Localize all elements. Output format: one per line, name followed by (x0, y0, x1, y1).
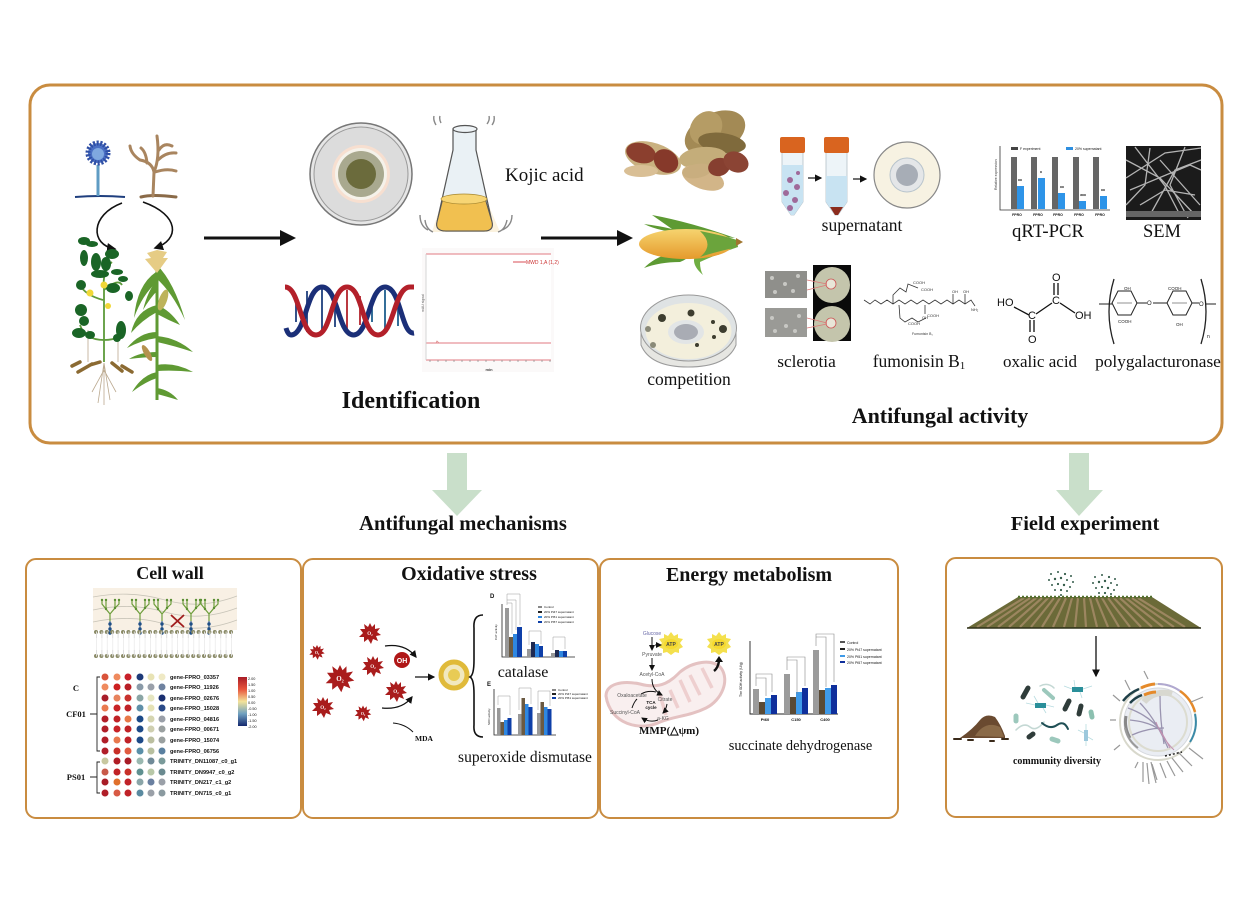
diagram: mitochondrion and TCA cycle: TCA (646, 700, 656, 705)
diagram: fumonisin B1 structure (864, 280, 979, 336)
chart: succinate dehydrogenase bars: The SDH activity (U/g) (739, 662, 743, 697)
diagram: fumonisin B1 structure: COOH (913, 280, 925, 285)
label: oxalic acid: oxalic acid (1003, 352, 1078, 371)
label: fumonisin B1: fumonisin B (873, 351, 960, 371)
chart: gene expression dot heatmap: gene-FPRO_00671 (170, 727, 219, 733)
arrow: fungus to maize (143, 202, 172, 248)
diagram: oxalic acid structure: C (1028, 310, 1036, 322)
heading: Oxidative stress: Oxidative stress (401, 563, 537, 585)
chart: superoxide dismutase bars: E (487, 682, 491, 688)
diagram: reactive oxygen species: OH (397, 658, 407, 665)
diagram: reactive oxygen species (309, 623, 434, 743)
diagram: mitochondrion and TCA cycle (606, 631, 731, 726)
heading: Identification: Identification (342, 388, 480, 414)
icon: DNA double helix (285, 287, 414, 335)
icon: competition petri dish (640, 295, 736, 367)
diagram: mitochondrion and TCA cycle: Acetyl-CoA (639, 672, 665, 678)
diagram: mitochondrion and TCA cycle: cycle (645, 705, 657, 710)
legend: colour scale: 1.50 (248, 683, 255, 687)
chart: gene expression dot heatmap: TRINITY_DN217_c1_g2 (170, 780, 231, 786)
icon: soil mound (954, 716, 1008, 741)
chart: succinate dehydrogenase bars: 20% Pt57 supernatant (847, 661, 882, 665)
panel: energy metabolism (600, 559, 898, 818)
icon: shaking flask (420, 116, 512, 232)
chart: qRT-PCR bars: FPRO (1012, 213, 1022, 217)
image: sclerotia (765, 265, 851, 342)
chart: gene expression dot heatmap: TRINITY_DN715_c0_g1 (170, 791, 231, 797)
chart: superoxide dismutase bars: 20% Pt47 supernatant (558, 692, 588, 696)
diagram: polygalacturonase structure: O (1199, 302, 1204, 308)
icon: fungal cell (441, 662, 467, 688)
diagram: fumonisin B1 structure: OH (952, 289, 958, 294)
label: qRT-PCR: qRT-PCR (1012, 221, 1084, 242)
chart: gene expression dot heatmap: PS01 (67, 772, 85, 782)
image: SEM micrograph (1126, 146, 1201, 220)
diagram: reactive oxygen species: O₂ (393, 690, 399, 695)
chart: gene expression dot heatmap: gene-FPRO_06756 (170, 749, 219, 755)
diagram: fumonisin B1 structure: COOH (921, 287, 933, 292)
label: catalase: catalase (498, 664, 548, 681)
label: superoxide dismutase: superoxide dismutase (458, 749, 592, 766)
chart: superoxide dismutase bars (487, 682, 588, 735)
diagram: polygalacturonase structure (1099, 279, 1216, 344)
chart: catalase bars: 20% Pt57 supernatant (544, 620, 574, 624)
arrow: to antifungal mechanisms (432, 453, 482, 516)
illustration: soil bacteria (1016, 680, 1093, 746)
label: fumonisin B1: 1 (960, 360, 965, 372)
arrow: identification to antifungal activity (541, 230, 633, 246)
diagram: mitochondrion and TCA cycle: a-KG (657, 716, 669, 722)
diagram: reactive oxygen species: O₂ (315, 650, 320, 655)
chart: succinate dehydrogenase bars: C400 (820, 717, 831, 722)
diagram: oxalic acid structure: O (1052, 272, 1061, 284)
icon: brown Fusarium fungus (130, 136, 176, 197)
label: MMP: MMP(△ψm) (639, 725, 699, 737)
chart: catalase bars: CAT activity (494, 624, 498, 640)
chart: gene expression dot heatmap: gene-FPRO_11926 (170, 685, 219, 691)
diagram: oxalic acid structure (997, 272, 1092, 346)
diagram: mitochondrion and TCA cycle: Glucose (643, 631, 661, 637)
icon: curly brace (470, 615, 483, 737)
chart: qRT-PCR bars: FPRO (1033, 213, 1043, 217)
chart: succinate dehydrogenase bars: C150 (791, 717, 802, 722)
diagram: mitochondrion and TCA cycle: Citrate (658, 697, 673, 703)
legend: colour scale: 1.00 (248, 689, 255, 693)
diagram: fumonisin B1 structure: COOH (927, 313, 939, 318)
panel: cell wall (26, 559, 301, 818)
icon: peanuts (621, 101, 752, 196)
panel: field experiment (946, 558, 1222, 817)
diagram: mitochondrion and TCA cycle: ATP (714, 642, 724, 648)
chart: HPLC chromatogram: MWD 1,A (1,2) (526, 260, 559, 266)
diagram: fumonisin B1 structure: Fumonisin B₁ (912, 332, 933, 336)
chart: superoxide dismutase bars: SOD activity (487, 708, 491, 725)
diagram: reactive oxygen species: O₂ (361, 711, 366, 716)
diagram: oxalic acid structure: C (1052, 295, 1060, 307)
diagram: polygalacturonase structure: OH (1124, 286, 1131, 291)
icon: peanut plant (72, 237, 133, 405)
diagram: polygalacturonase structure: COOH (1168, 286, 1182, 291)
chart: qRT-PCR bars: ** (1060, 186, 1064, 192)
label: succinate dehydrogenase: succinate dehydrogenase (729, 738, 872, 754)
chart: catalase bars: Control (544, 605, 554, 609)
diagram: oxalic acid structure: O (1028, 334, 1037, 346)
label: polygalacturonase: polygalacturonase (1095, 352, 1221, 371)
chart: qRT-PCR bars: Relative expression (994, 159, 998, 190)
panel: identification and antifungal activity (30, 85, 1222, 443)
label: competition: competition (647, 369, 731, 389)
chart: succinate dehydrogenase bars: 20% Pt51 supernatant (847, 655, 882, 659)
chart: qRT-PCR bars: FPRO (1095, 213, 1105, 217)
chart: gene expression dot heatmap: C (73, 683, 79, 693)
diagram: mitochondrion and TCA cycle: Succinyl-CoA (610, 710, 641, 716)
diagram: polygalacturonase structure: O (1147, 301, 1152, 307)
chart: gene expression dot heatmap: gene-FPRO_15074 (170, 738, 220, 744)
panel: oxidative stress (303, 559, 598, 818)
label: Kojic acid: Kojic acid (505, 165, 584, 186)
chart: catalase bars (490, 594, 575, 657)
arrow: field to soil community (1095, 636, 1097, 676)
diagram: polygalacturonase structure: OH (1176, 322, 1183, 327)
chart: superoxide dismutase bars: Control (558, 688, 568, 692)
diagram: fumonisin B1 structure: COOH (908, 321, 920, 326)
diagram: fumonisin B1 structure: OH (922, 315, 928, 320)
chart: catalase bars: D (490, 594, 495, 600)
legend: colour scale: 2.00 (248, 677, 255, 681)
chart: qRT-PCR bars: ** (1101, 189, 1105, 195)
chart: gene expression dot heatmap: TRINITY_DN9947_c0_g2 (170, 770, 234, 776)
diagram: fumonisin B1 structure: OH (963, 289, 969, 294)
heading: Cell wall: Cell wall (136, 563, 204, 583)
diagram: oxalic acid structure: OH (1075, 310, 1092, 322)
legend: colour scale: 0.00 (248, 701, 255, 705)
icon: centrifuge tubes to plate (780, 137, 940, 215)
heading: Field experiment: Field experiment (1011, 513, 1159, 535)
chart: succinate dehydrogenase bars: 20% Pt47 supernatant (847, 648, 882, 652)
label: sclerotia: sclerotia (777, 352, 836, 371)
chart: qRT-PCR bars (994, 146, 1110, 217)
diagram: reactive oxygen species: O₂ (336, 675, 344, 683)
label: SEM: SEM (1143, 222, 1181, 242)
diagram: reactive oxygen species: O₂ (367, 632, 373, 637)
diagram: cell membrane with glycan chains (93, 588, 237, 656)
legend: colour scale: -2.00 (248, 725, 257, 729)
diagram: reactive oxygen species: O₂ (320, 706, 326, 711)
chart: succinate dehydrogenase bars: Control (847, 641, 859, 645)
arrow: fungus to peanut (97, 203, 122, 249)
chart: catalase bars: 20% Pt47 supernatant (544, 610, 574, 614)
chart: qRT-PCR bars: FPRO (1074, 213, 1084, 217)
chart: circos diagram (1110, 671, 1203, 784)
chart: catalase bars: 20% Pt51 supernatant (544, 615, 574, 619)
icon: corn cob (639, 215, 743, 275)
icon: spray droplets (1048, 571, 1118, 599)
label: community diversity: community diversity (1013, 756, 1101, 767)
diagram: mitochondrion and TCA cycle: Oxaloacetate (617, 693, 647, 699)
chart: qRT-PCR bars: * (1040, 171, 1042, 177)
arrow: plants to identification (204, 230, 296, 246)
chart: qRT-PCR bars: ** (1018, 179, 1022, 185)
diagram: mitochondrion and TCA cycle: Pyruvate (642, 652, 662, 658)
legend: colour scale: -1.00 (248, 713, 257, 717)
chart: gene expression dot heatmap: gene-FPRO_02676 (170, 696, 219, 702)
heading: Energy metabolism: Energy metabolism (666, 564, 832, 586)
chart: gene expression dot heatmap: CF01 (66, 709, 86, 719)
legend: colour scale (238, 677, 257, 729)
illustration: crop field (967, 597, 1201, 628)
arrow: to field experiment (1056, 453, 1103, 516)
chart: gene expression dot heatmap: TRINITY_DN11087_c0_g1 (170, 759, 237, 765)
chart: qRT-PCR bars: 20% supernatant (1075, 147, 1101, 151)
legend: colour scale: -1.50 (248, 719, 257, 723)
heading: Antifungal mechanisms: Antifungal mechanisms (359, 513, 567, 535)
diagram: fumonisin B1 structure: NH₂ (971, 307, 979, 312)
chart: superoxide dismutase bars: 20% Pt51 supernatant (558, 696, 588, 700)
chart: HPLC chromatogram (421, 248, 559, 372)
chart: qRT-PCR bars: F experiment (1020, 147, 1040, 151)
legend: colour scale: 0.50 (248, 695, 255, 699)
diagram: reactive oxygen species: O₂ (370, 665, 376, 670)
diagram: oxalic acid structure: HO (997, 297, 1014, 309)
chart: gene expression dot heatmap (66, 674, 237, 797)
chart: gene expression dot heatmap: gene-FPRO_15028 (170, 706, 219, 712)
chart: succinate dehydrogenase bars: Pt60 (761, 717, 770, 722)
diagram: polygalacturonase structure: COOH (1118, 319, 1132, 324)
chart: gene expression dot heatmap: gene-FPRO_04816 (170, 717, 219, 723)
chart: HPLC chromatogram: min (485, 367, 493, 372)
legend: colour scale: -0.50 (248, 707, 257, 711)
diagram: polygalacturonase structure: n (1207, 334, 1210, 340)
chart: qRT-PCR bars: FPRO (1053, 213, 1063, 217)
icon: maize plant (127, 250, 193, 400)
heading: Antifungal activity: Antifungal activity (852, 403, 1028, 428)
icon: blue Aspergillus fungus (75, 143, 125, 197)
chart: HPLC chromatogram: mAU signal (421, 294, 425, 312)
label: supernatant: supernatant (822, 215, 902, 235)
diagram: reactive oxygen species: MDA (415, 734, 434, 743)
chart: succinate dehydrogenase bars (739, 634, 882, 722)
chart: qRT-PCR bars: *** (1080, 194, 1086, 200)
chart: gene expression dot heatmap: gene-FPRO_03357 (170, 675, 219, 681)
diagram: mitochondrion and TCA cycle: ATP (666, 642, 676, 648)
icon: petri dish (310, 123, 412, 225)
